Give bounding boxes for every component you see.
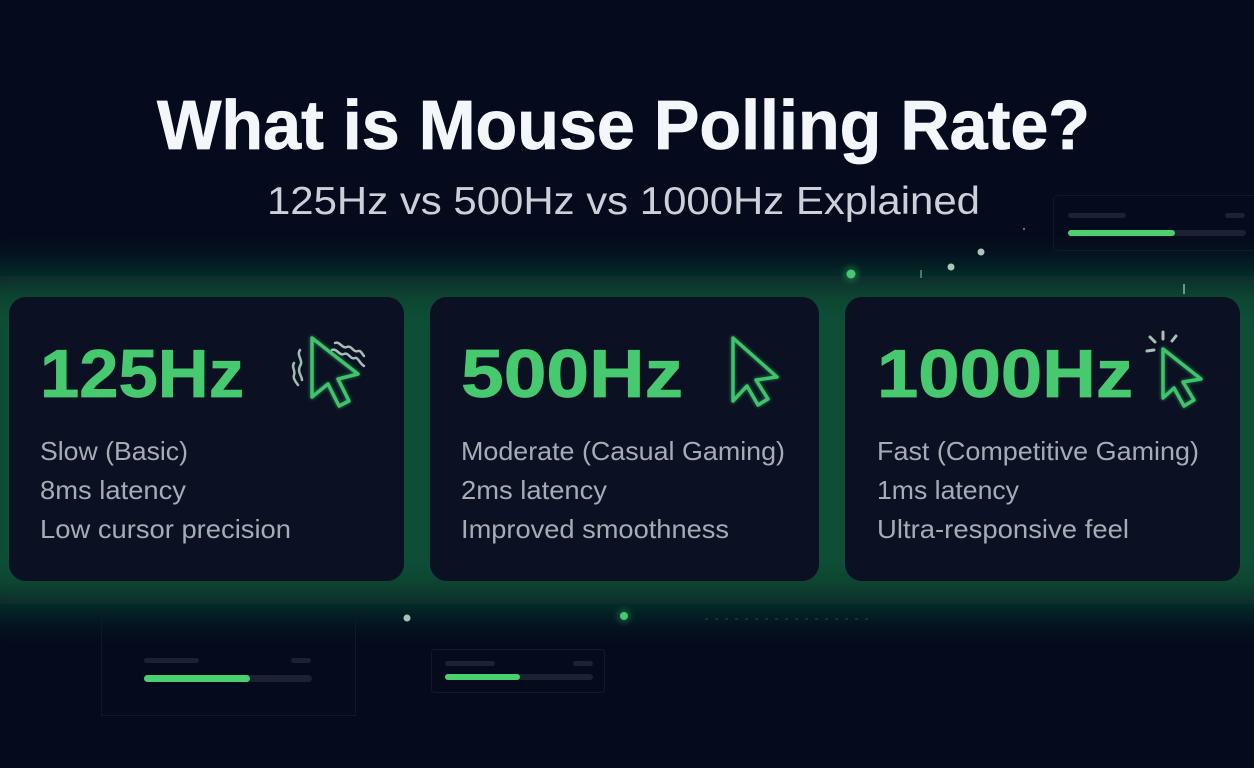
decorative widget: top right — [1054, 196, 1254, 250]
1000Hz details — [877, 436, 1199, 544]
1000Hz details: Ultra-responsive feel — [877, 514, 1129, 544]
125Hz value: 125Hz — [40, 336, 244, 412]
1000Hz details: Fast (Competitive Gaming) — [877, 436, 1199, 466]
decorative dots — [404, 228, 1185, 623]
green glow behind cards — [0, 276, 1254, 604]
subtitle: 125Hz vs 500Hz vs 1000Hz Explained — [267, 180, 980, 223]
title: What is Mouse Polling Rate? — [157, 86, 1090, 164]
1000Hz value: 1000Hz — [877, 336, 1133, 412]
500Hz details: Moderate (Casual Gaming) — [461, 436, 785, 466]
125Hz details: 8ms latency — [40, 475, 186, 505]
500Hz details: Improved smoothness — [461, 514, 729, 544]
125Hz details: Slow (Basic) — [40, 436, 188, 466]
icon: vibrating cursor — [293, 338, 364, 406]
card: 125Hz — [9, 297, 404, 581]
125Hz details: Low cursor precision — [40, 514, 291, 544]
card: 500Hz — [430, 297, 819, 581]
decorative widget: bottom centre — [432, 650, 604, 692]
decorative widget: bottom left — [102, 612, 356, 716]
icon: clicking cursor — [1147, 332, 1201, 406]
1000Hz details: 1ms latency — [877, 475, 1019, 505]
500Hz value: 500Hz — [461, 336, 683, 412]
500Hz details: 2ms latency — [461, 475, 607, 505]
500Hz details — [461, 436, 785, 544]
125Hz details — [40, 436, 291, 544]
card: 1000Hz — [845, 297, 1240, 581]
icon: cursor — [733, 338, 777, 405]
